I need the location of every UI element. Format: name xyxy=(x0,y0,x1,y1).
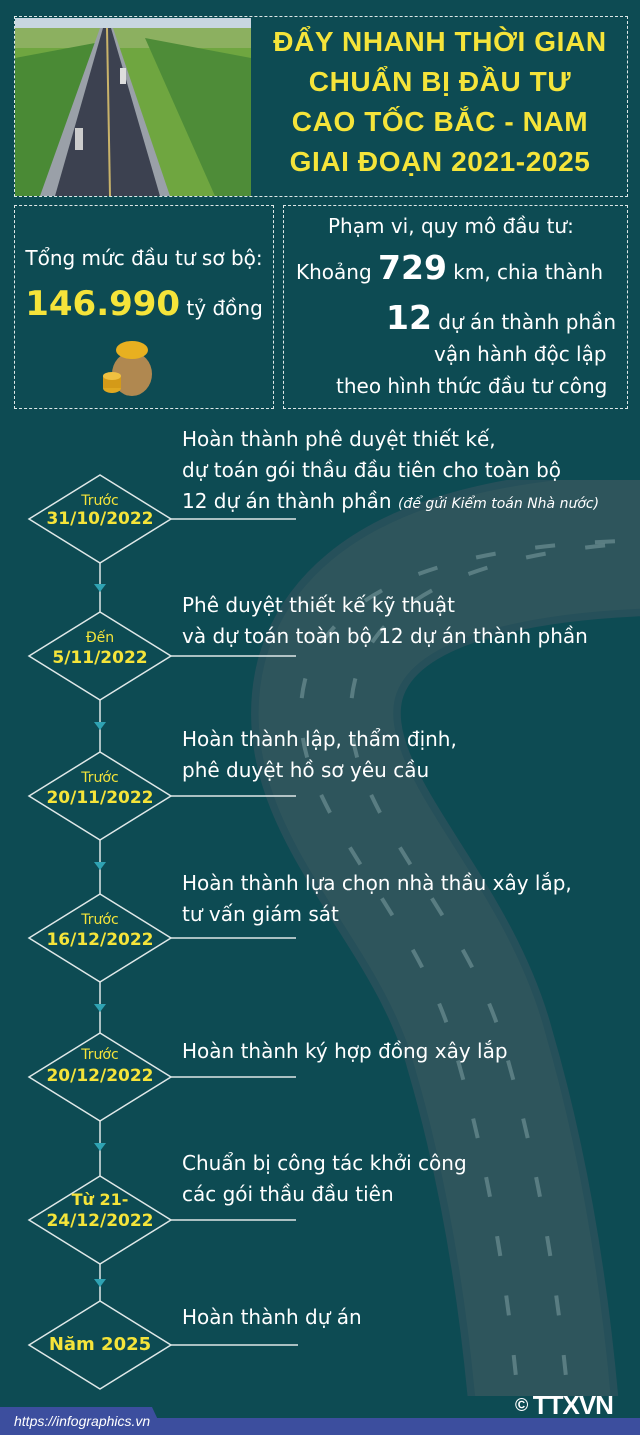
label: Tổng mức đầu tư sơ bộ: xyxy=(25,246,263,270)
milestone 4 date xyxy=(46,912,154,950)
milestone 1 date: 31/10/2022 xyxy=(46,509,154,529)
milestone 6 text: Chuẩn bị công tác khởi công xyxy=(182,1151,467,1175)
milestone 6 date xyxy=(46,1190,154,1231)
title: CHUẨN BỊ ĐẦU TƯ xyxy=(309,66,571,97)
milestone 5 date xyxy=(46,1047,154,1086)
panel: scope: vận hành độc lập xyxy=(434,342,607,366)
milestone 1 date: Trước xyxy=(81,493,119,509)
milestone 6 text: các gói thầu đầu tiên xyxy=(182,1182,394,1206)
milestone 4 date: Trước xyxy=(81,912,119,928)
milestone 7 text: Hoàn thành dự án xyxy=(182,1305,362,1329)
header panel xyxy=(14,16,628,197)
milestone 1 text: 12 dự án thành phần (để gửi Kiểm toán Nhà nước) xyxy=(182,489,599,513)
milestone 1 text: dự toán gói thầu đầu tiên cho toàn bộ xyxy=(182,458,561,482)
milestone 4 text xyxy=(182,871,572,926)
milestone 4 text: Hoàn thành lựa chọn nhà thầu xây lắp, xyxy=(182,871,572,895)
milestone 3 text: phê duyệt hồ sơ yêu cầu xyxy=(182,758,429,782)
panel: scope: theo hình thức đầu tư công xyxy=(336,374,607,398)
milestone 3 text: Hoàn thành lập, thẩm định, xyxy=(182,727,457,751)
panel: scope: Khoảng 729 km, chia thành xyxy=(296,248,603,287)
background road xyxy=(251,480,640,1396)
footer url: https://infographics.vn xyxy=(14,1413,150,1429)
milestone 3 date: Trước xyxy=(81,770,119,786)
title: CAO TỐC BẮC - NAM xyxy=(292,106,588,137)
milestone 6 date: 24/12/2022 xyxy=(46,1211,154,1231)
milestone 3 date xyxy=(46,770,154,808)
milestone 3 text xyxy=(182,727,457,782)
panel: scope: 12 dự án thành phần xyxy=(386,298,616,337)
milestone 2 date: 5/11/2022 xyxy=(52,648,148,668)
milestone 1 text xyxy=(182,427,599,513)
panel: scope: Phạm vi, quy mô đầu tư: xyxy=(328,214,574,238)
milestone 5 date: 20/12/2022 xyxy=(46,1066,154,1086)
title: ĐẨY NHANH THỜI GIAN xyxy=(273,26,607,57)
milestone 7 date: Năm 2025 xyxy=(49,1334,151,1355)
panel: scope xyxy=(283,205,628,409)
milestone 5 text: Hoàn thành ký hợp đồng xây lắp xyxy=(182,1039,508,1063)
milestone 1 date xyxy=(46,493,154,529)
panel: total investment xyxy=(14,205,274,409)
milestone 2 date xyxy=(52,630,148,668)
milestone 2 date: Đến xyxy=(86,630,114,646)
milestone 2 text xyxy=(182,593,588,648)
milestone 5 date: Trước xyxy=(81,1047,119,1063)
milestone 3 date: 20/11/2022 xyxy=(46,788,154,808)
milestone 2 text: Phê duyệt thiết kế kỹ thuật xyxy=(182,593,455,617)
title: GIAI ĐOẠN 2021-2025 xyxy=(290,146,590,177)
title xyxy=(273,26,607,177)
milestone 6 text xyxy=(182,1151,467,1206)
milestone 2 text: và dự toán toàn bộ 12 dự án thành phần xyxy=(182,624,588,648)
footer bar xyxy=(0,1418,640,1435)
logo: © TTXVN xyxy=(515,1390,613,1420)
value: 146.990 tỷ đồng xyxy=(25,284,263,324)
milestone 1 text: Hoàn thành phê duyệt thiết kế, xyxy=(182,427,496,451)
milestone 6 date: Từ 21- xyxy=(72,1190,128,1209)
photo: highway xyxy=(15,18,251,196)
milestone 4 date: 16/12/2022 xyxy=(46,930,154,950)
milestone 4 text: tư vấn giám sát xyxy=(182,902,339,926)
icon: money bag xyxy=(103,341,152,396)
footer url xyxy=(0,1407,157,1429)
